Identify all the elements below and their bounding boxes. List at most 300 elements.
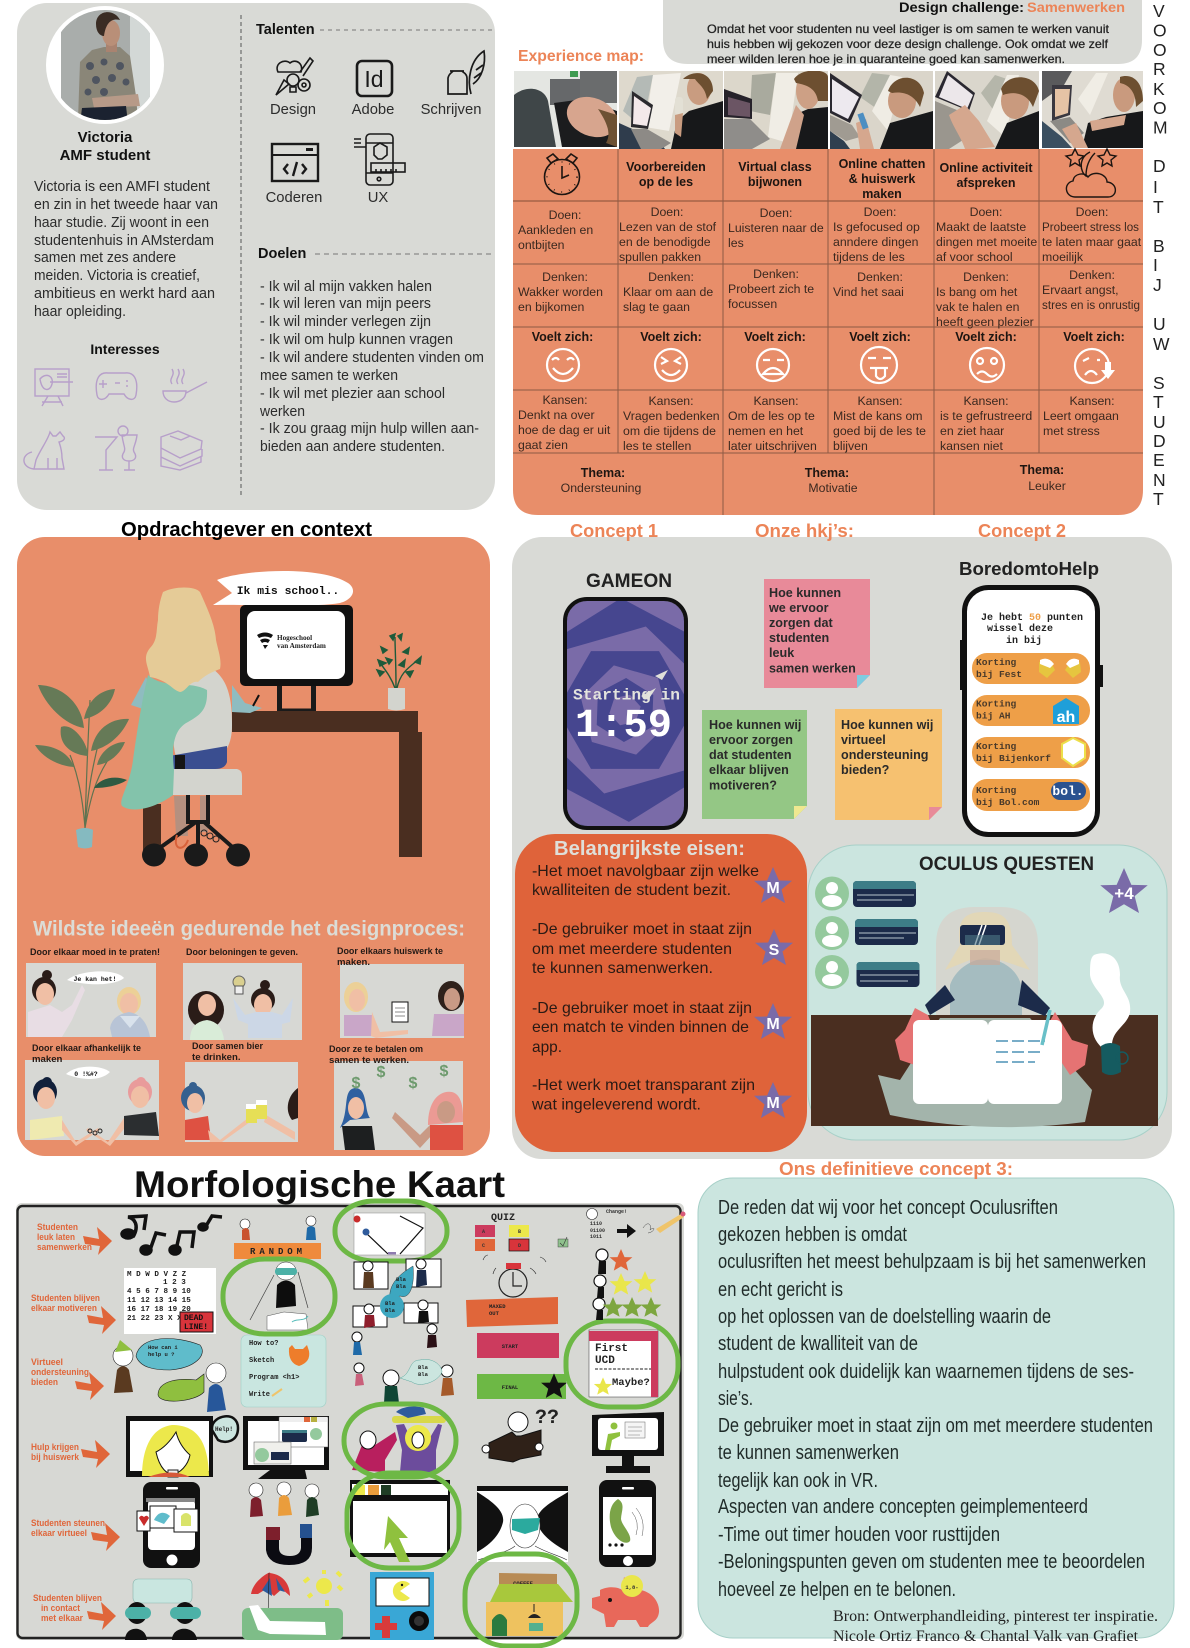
sticky note: orange: ondersteuning (841, 748, 928, 762)
plant right (377, 634, 421, 710)
goals list: - Ik wil leren van mijn peers (260, 296, 431, 312)
bio text: ambitieus en werkt hard aan (34, 286, 215, 302)
photo: waking up (514, 71, 617, 147)
sticky note: pink: leuk (769, 646, 795, 660)
panel: belangrijkste eisen: -De gebruiker moet in staat zijn (532, 1000, 752, 1017)
row labels: Studenten (37, 1222, 78, 1233)
panel: definitive concept text: gekozen hebben is omdat (718, 1224, 907, 1246)
help monitor: Help! (215, 1426, 233, 1433)
idea card: encouragement (26, 963, 156, 1037)
panel: belangrijkste eisen: Belangrijkste eisen: (554, 838, 745, 860)
row: denken: Denken: (542, 270, 588, 284)
design challenge bubble: meer wilden leren hoe je in quaranteine goed kan samenwerken. (707, 53, 1065, 66)
row: denken: Denken: (1069, 268, 1115, 282)
help monitor (126, 1416, 238, 1477)
portrait photo (46, 6, 164, 124)
row: doen: Probeert stress los (1042, 220, 1139, 234)
sticky note: pink: we ervoor (768, 601, 829, 615)
label: schrijven: Schrijven (421, 102, 481, 118)
icon: adobe (357, 61, 392, 96)
row labels: bij huiswerk (31, 1452, 80, 1463)
row labels: Studenten blijven (31, 1293, 100, 1304)
vertical title: M (1153, 118, 1168, 138)
icon: moon and cloud (1066, 149, 1116, 197)
badge: S: S (769, 942, 780, 959)
panel: definitive concept text: student de kwalliteit van de (718, 1333, 918, 1355)
offer: bol: Korting (976, 785, 1017, 796)
heading: doelen: Doelen (258, 246, 306, 262)
calendar (124, 1268, 216, 1334)
buttons: maxed out, start, final: FINAL (502, 1384, 519, 1391)
sticky note: green: elkaar blijven (709, 763, 789, 777)
panel: belangrijkste eisen: kwalliteiten de student bezit. (532, 882, 731, 899)
row: doen: Aankleden en (518, 223, 593, 237)
computer screens (243, 1416, 329, 1479)
calendar: 4 5 6 7 8 9 10 (127, 1288, 191, 1296)
captions: Door samen bier (192, 1041, 263, 1052)
icon: coderen (272, 144, 318, 181)
selected: coffee house (465, 1554, 577, 1646)
idea card: rewards (183, 963, 302, 1040)
photo: online activity (935, 71, 1039, 149)
speech bubble: Ik mis school.. (237, 586, 339, 598)
how to panel (241, 1335, 326, 1407)
source credits (833, 1608, 1158, 1645)
bla bla screens (353, 1259, 441, 1328)
row labels: in contact (41, 1603, 81, 1614)
reader: ?? (535, 1407, 559, 1430)
column headers: Online activiteit (939, 161, 1033, 175)
icon: music notes (122, 1216, 222, 1254)
panel: belangrijkste eisen: -De gebruiker moet in staat zijn (532, 921, 752, 938)
row labels: ondersteuning (31, 1367, 89, 1378)
icon: ux (354, 134, 405, 185)
row labels: Hulp krijgen (31, 1442, 79, 1453)
idea card: encouragement: Je kan het! (74, 976, 116, 983)
sticky note: green (702, 710, 807, 819)
photo: relaxing (1042, 71, 1143, 148)
how to panel: Write (249, 1391, 270, 1399)
quiz: B (518, 1229, 521, 1235)
row: doen: af voor school (936, 250, 1013, 264)
row labels: elkaar motiveren (31, 1303, 97, 1314)
phone: gameon (563, 597, 688, 830)
bla bla screens: Bla (385, 1300, 396, 1307)
idea card: dependency (25, 1060, 159, 1146)
row: voelt zich: Voelt zich: (849, 330, 911, 344)
design challenge bubble (663, 0, 1142, 66)
row: kansen: is te gefrustreerd (940, 409, 1032, 423)
row: thema: Ondersteuning (561, 481, 641, 495)
panel: belangrijkste eisen: app. (532, 1039, 562, 1056)
row labels: met elkaar (41, 1613, 83, 1624)
row: doen: dingen met moeite (936, 235, 1037, 249)
captions: Door beloningen te geven. (186, 947, 298, 958)
column headers: op de les (639, 175, 693, 189)
vertical title: T (1153, 392, 1164, 412)
offer: bijenkorf: Korting (976, 741, 1017, 752)
row: kansen: Kansen: (1069, 394, 1115, 408)
row: denken: Denken: (648, 270, 694, 284)
row: kansen: Mist de kans om (833, 409, 923, 423)
three figures and magnet (249, 1482, 319, 1565)
icon: adobe: Id (364, 66, 384, 92)
steam and mug (1090, 953, 1130, 1075)
row labels: samenwerken (37, 1242, 92, 1253)
row labels (31, 1222, 105, 1624)
vertical title: K (1153, 79, 1165, 99)
quiz (475, 1213, 568, 1251)
calendar: M D W D V Z Z (127, 1271, 187, 1279)
row: doen: tijdens de les (833, 250, 905, 264)
row: kansen: Kansen: (753, 394, 799, 408)
phone with cards (137, 1482, 200, 1568)
vertical title: O (1153, 20, 1167, 40)
monitor: van Amsterdam (277, 642, 326, 650)
row: denken: en bijkomen (518, 300, 584, 314)
offer: ah: Korting (976, 698, 1017, 710)
change diagram: 01100 (590, 1228, 605, 1234)
row: kansen: en ziet haar (940, 424, 1004, 438)
bio text: studentenhuis in AMsterdam (34, 233, 214, 249)
row: voelt zich: Voelt zich: (1063, 330, 1125, 344)
selected: teacher and student (344, 1404, 456, 1477)
sticky note: orange: Hoe kunnen wij (841, 718, 933, 732)
selected: coffee house: COFFEE (513, 1580, 534, 1587)
monitor: Hogeschool (277, 634, 312, 642)
seat (172, 769, 242, 795)
row: kansen: later uitschrijven (728, 439, 817, 453)
row: thema: Motivatie (808, 481, 858, 495)
phone: boredomtohelp (960, 588, 1103, 834)
panel: belangrijkste eisen: een match te vinden binnen de (532, 1019, 749, 1036)
row labels: leuk laten (37, 1232, 75, 1243)
heading: gameon: GAMEON (586, 571, 672, 592)
row: doen: en de benodigde (619, 235, 711, 249)
row: doen: Doen: (970, 205, 1002, 219)
captions: Door elkaars huiswerk te (337, 946, 443, 957)
torso (173, 662, 232, 757)
name (60, 129, 150, 164)
illustration: student at desk (121, 571, 422, 866)
captions (30, 946, 443, 1066)
timer (483, 1255, 546, 1297)
row: thema: Thema: (805, 466, 849, 480)
row: doen: te laten maar gaat (1042, 235, 1142, 249)
icon: design (276, 58, 313, 95)
how to panel: Program <h1> (249, 1374, 299, 1382)
buttons: maxed out, start, final: START (502, 1343, 519, 1350)
bio text (34, 179, 218, 320)
idea card: paying: $ (377, 1064, 386, 1081)
idea card: paying (334, 1061, 463, 1150)
row: denken: Denken: (857, 270, 903, 284)
heading: boredomtohelp: BoredomtoHelp (959, 558, 1099, 579)
idea card: paying: $ (352, 1075, 361, 1092)
sticky note: orange (835, 709, 942, 820)
row: denken: Klaar om aan de (623, 285, 713, 299)
row: denken: vak te halen en (936, 300, 1020, 314)
sticky note: green: Hoe kunnen wij (709, 718, 801, 732)
vertical title: O (1153, 40, 1167, 60)
sticky note: orange: virtueel (841, 733, 886, 747)
row labels: bieden (31, 1377, 58, 1388)
captions: maken. (337, 957, 370, 968)
row: doen: Luisteren naar de (728, 221, 824, 235)
column headers: bijwonen (748, 175, 802, 189)
panel: belangrijkste eisen: -Het moet navolgbaar zijn welke (532, 863, 759, 880)
panel: definitive concept text: hoeveel ze helpen en te belonen. (718, 1579, 956, 1601)
quiz: A (482, 1229, 485, 1235)
calendar: 11 12 13 14 15 (127, 1297, 191, 1305)
idea card: paying: $ (409, 1075, 418, 1092)
captions: Door elkaar afhankelijk te (32, 1043, 141, 1054)
row: doen: anndere dingen (833, 235, 919, 249)
design challenge bubble: Omdat het voor studenten nu veel lastiger is om samen te werken vanuit (707, 23, 1110, 36)
change diagram (586, 1208, 686, 1240)
vertical title: J (1153, 275, 1162, 295)
shawl (121, 675, 207, 810)
plant left (35, 685, 129, 848)
row: kansen: Kansen: (963, 394, 1009, 408)
sticky note: pink: Hoe kunnen (769, 586, 841, 600)
column headers (626, 157, 1033, 201)
label: coderen: Coderen (266, 190, 322, 206)
photo row (514, 70, 1143, 149)
captions: Door ze te betalen om (329, 1044, 423, 1055)
row: doen: Doen: (651, 205, 683, 219)
captions: Door elkaar moed in te praten! (30, 947, 160, 958)
bio text: samen met zes andere (34, 250, 176, 266)
photo: chatting (830, 71, 933, 149)
column headers: maken (862, 187, 902, 201)
ranking stars (593, 1249, 661, 1320)
sticky note: orange: bieden? (841, 763, 889, 777)
phone: boredomtohelp: wissel deze (987, 623, 1053, 635)
panel: definitive concept text: op het oplossen van de doelstelling waarin de (718, 1306, 1051, 1328)
row labels: Studenten blijven (33, 1593, 102, 1604)
row: denken: Denken: (963, 270, 1009, 284)
label: adobe: Adobe (352, 102, 394, 118)
offer: ah: ah (1057, 709, 1075, 726)
row: doen: Doen: (760, 206, 792, 220)
heading: opdrachtgever en context: Opdrachtgever en context (121, 519, 372, 541)
small figures with bubble: Bla (418, 1364, 429, 1371)
headings: concepts: Onze hkj’s: (755, 520, 854, 541)
goals list: - Ik wil al mijn vakken halen (260, 279, 432, 295)
panel: oculus questen: OCULUS QUESTEN (919, 854, 1094, 875)
row: denken (518, 267, 1140, 329)
vertical title: T (1153, 197, 1164, 217)
sticky note: pink: studenten (769, 631, 829, 645)
sticky note: pink: samen werken (769, 662, 856, 676)
column headers: afspreken (956, 176, 1016, 190)
bla bla screens: Bla (396, 1276, 407, 1283)
row: kansen: om die tijdens de (623, 424, 716, 438)
column headers: Voorbereiden (626, 160, 706, 174)
buttons: maxed out, start, final (466, 1297, 567, 1399)
vertical title: D (1153, 431, 1166, 451)
desk (811, 1015, 1158, 1126)
vertical title: I (1153, 255, 1158, 275)
row: kansen: Om de les op te (728, 409, 815, 423)
heading: morfologische kaart: Morfologische Kaart (134, 1164, 505, 1205)
badge: M: M (766, 1016, 780, 1033)
panel: morfologische kaart (16, 1201, 686, 1646)
phone: boredomtohelp: in bij (1006, 635, 1042, 647)
idea card: paying: $ (440, 1063, 449, 1080)
captions: maken (32, 1054, 63, 1065)
badge: +4 (1100, 868, 1148, 913)
virtual support figures: help u ? (148, 1351, 174, 1358)
hair (146, 588, 221, 692)
panel: definitive concept text: De reden dat wij voor het concept Oculusriften (718, 1197, 1058, 1219)
source credits: Nicole Ortiz Franco & Chantal Valk van Grafiet (833, 1628, 1139, 1645)
row: kansen: les te stellen (623, 439, 692, 453)
vertical title: V (1153, 1, 1165, 21)
row: denken: Denken: (753, 267, 799, 281)
selected: maze screen (335, 1201, 447, 1261)
goals list: - Ik wil om hulp kunnen vragen (260, 332, 453, 348)
goals list: werken (259, 404, 305, 420)
icon: down arrow (1101, 362, 1115, 379)
icon: alarm clock (544, 154, 580, 194)
vertical title (1153, 1, 1170, 509)
row: denken: slag te gaan (623, 300, 690, 314)
heading: experience map: Experience map: (518, 48, 644, 65)
monitor (240, 605, 353, 711)
bio text: haar opleiding. (34, 304, 126, 320)
contact figures with goggles (125, 1579, 201, 1640)
row: kansen (518, 393, 1119, 453)
offer: fest: Korting (976, 657, 1017, 668)
row: thema (561, 463, 1066, 495)
design challenge bubble: huis hebben wij gekozen voor deze design challenge. Ook omdat we zelf (707, 38, 1109, 51)
goals list: - Ik wil minder verlegen zijn (260, 314, 431, 330)
divider line (240, 15, 242, 496)
panel: definitive concept text: tegelijk kan ook in VR. (718, 1470, 878, 1492)
quiz: C (482, 1243, 485, 1249)
name: Victoria (78, 129, 133, 146)
row: thema: Thema: (581, 466, 625, 480)
chair back (936, 907, 1038, 1020)
vertical title: U (1153, 412, 1166, 432)
row: voelt zich: Voelt zich: (532, 330, 593, 344)
offer: ah (972, 695, 1090, 726)
row: denken: Wakker worden (518, 285, 603, 299)
game device (370, 1572, 434, 1640)
piggy bank: 1,8- (625, 1584, 639, 1591)
row: denken: Vind het saai (833, 285, 904, 299)
calendar: DEAD (184, 1314, 203, 1323)
phone: gameon: Starting in (573, 686, 680, 704)
figures and random bar: RANDOM (250, 1247, 302, 1257)
offer: bol: bol. (1052, 784, 1084, 799)
row: denken: Ervaart angst, (1042, 283, 1119, 297)
goals list: - Ik zou graag mijn hulp willen aan- (260, 421, 479, 437)
sticky note: pink: zorgen dat (769, 616, 833, 630)
small figures with bubble: Bla (418, 1371, 429, 1378)
row: kansen: Leert omgaan (1043, 409, 1119, 423)
speech bubble (213, 571, 353, 606)
panel: belangrijkste eisen (515, 834, 807, 1152)
buttons: maxed out, start, final: OUT (489, 1310, 500, 1317)
idea card: homework (340, 964, 464, 1038)
panel: belangrijkste eisen: om met meerdere studenten (532, 941, 732, 958)
row: kansen: Denkt na over (518, 408, 595, 422)
row: kansen: goed bij de les te (833, 424, 926, 438)
selected: ucd card: UCD (595, 1355, 615, 1367)
change diagram: Change! (606, 1209, 627, 1215)
panel: belangrijkste eisen: -Het werk moet transparant zijn (532, 1077, 755, 1094)
offer: bijenkorf (972, 737, 1090, 768)
bio text: en zin in het tweede haar van (34, 197, 218, 213)
vr sketch with book (250, 1262, 308, 1330)
panel: definitive concept text: en echt gericht is (718, 1279, 843, 1301)
panel: oculus questen (808, 845, 1167, 1140)
panel: definitive concept text: Aspecten van andere concepten geimplementeerd (718, 1496, 1088, 1518)
umbrella, sun and lounger (242, 1570, 343, 1640)
quiz: QUIZ (491, 1213, 515, 1224)
row: doen: Lezen van de stof (619, 220, 717, 234)
offer: fest: bij Fest (976, 669, 1022, 680)
buttons: maxed out, start, final: MAXED (489, 1303, 506, 1310)
row labels: elkaar virtueel (31, 1528, 87, 1539)
idea card: beer (181, 1062, 298, 1142)
panel: persona (17, 3, 495, 510)
label: design: Design (270, 102, 316, 118)
row: kansen: Kansen: (857, 394, 903, 408)
selected: cursor screen (347, 1473, 459, 1568)
row: doen: Doen: (549, 208, 581, 222)
row labels: Virtueel (31, 1357, 63, 1368)
vertical title: N (1153, 470, 1166, 490)
open book (913, 1010, 1062, 1104)
row: doen: moeilijk (1042, 250, 1084, 264)
offer: ah: bij AH (976, 710, 1011, 722)
captions: samen te werken. (329, 1055, 409, 1066)
icon: schrijven (448, 51, 485, 94)
panel: opdrachtgever (17, 537, 490, 1156)
piggy bank (592, 1575, 659, 1627)
calendar: 16 17 18 19 20 (127, 1306, 191, 1314)
chair base (142, 795, 250, 866)
row: voelt zich: Voelt zich: (744, 330, 806, 344)
idea card: dependency: 0 !%#? (74, 1071, 98, 1078)
offer: bol (972, 779, 1090, 811)
row: kansen: gaat zien (518, 438, 568, 452)
vertical title: D (1153, 156, 1166, 176)
row: doen: spullen pakken (619, 250, 701, 264)
badge: M: M (766, 1095, 780, 1112)
goals list: mee samen te werken (260, 368, 398, 384)
badge: S (755, 929, 793, 965)
vr portrait (477, 1486, 568, 1562)
phone: gameon: 1:59 (575, 704, 672, 749)
row: kansen: blijven (833, 439, 868, 453)
virtual support figures: How can i (148, 1344, 178, 1351)
selected: ucd card: Maybe? (612, 1377, 650, 1389)
bio text: haar studie. Zij woont in een (34, 215, 209, 231)
headings: concepts: Concept 1 (570, 520, 658, 541)
bla bla screens: Bla (385, 1307, 396, 1314)
offer: bol: bij Bol.com (976, 797, 1040, 808)
label: ux: UX (368, 190, 388, 206)
column headers: & huiswerk (849, 172, 915, 186)
row: doen: les (728, 236, 744, 250)
row: kansen: Vragen bedenken (623, 409, 720, 423)
goals list (259, 279, 484, 455)
